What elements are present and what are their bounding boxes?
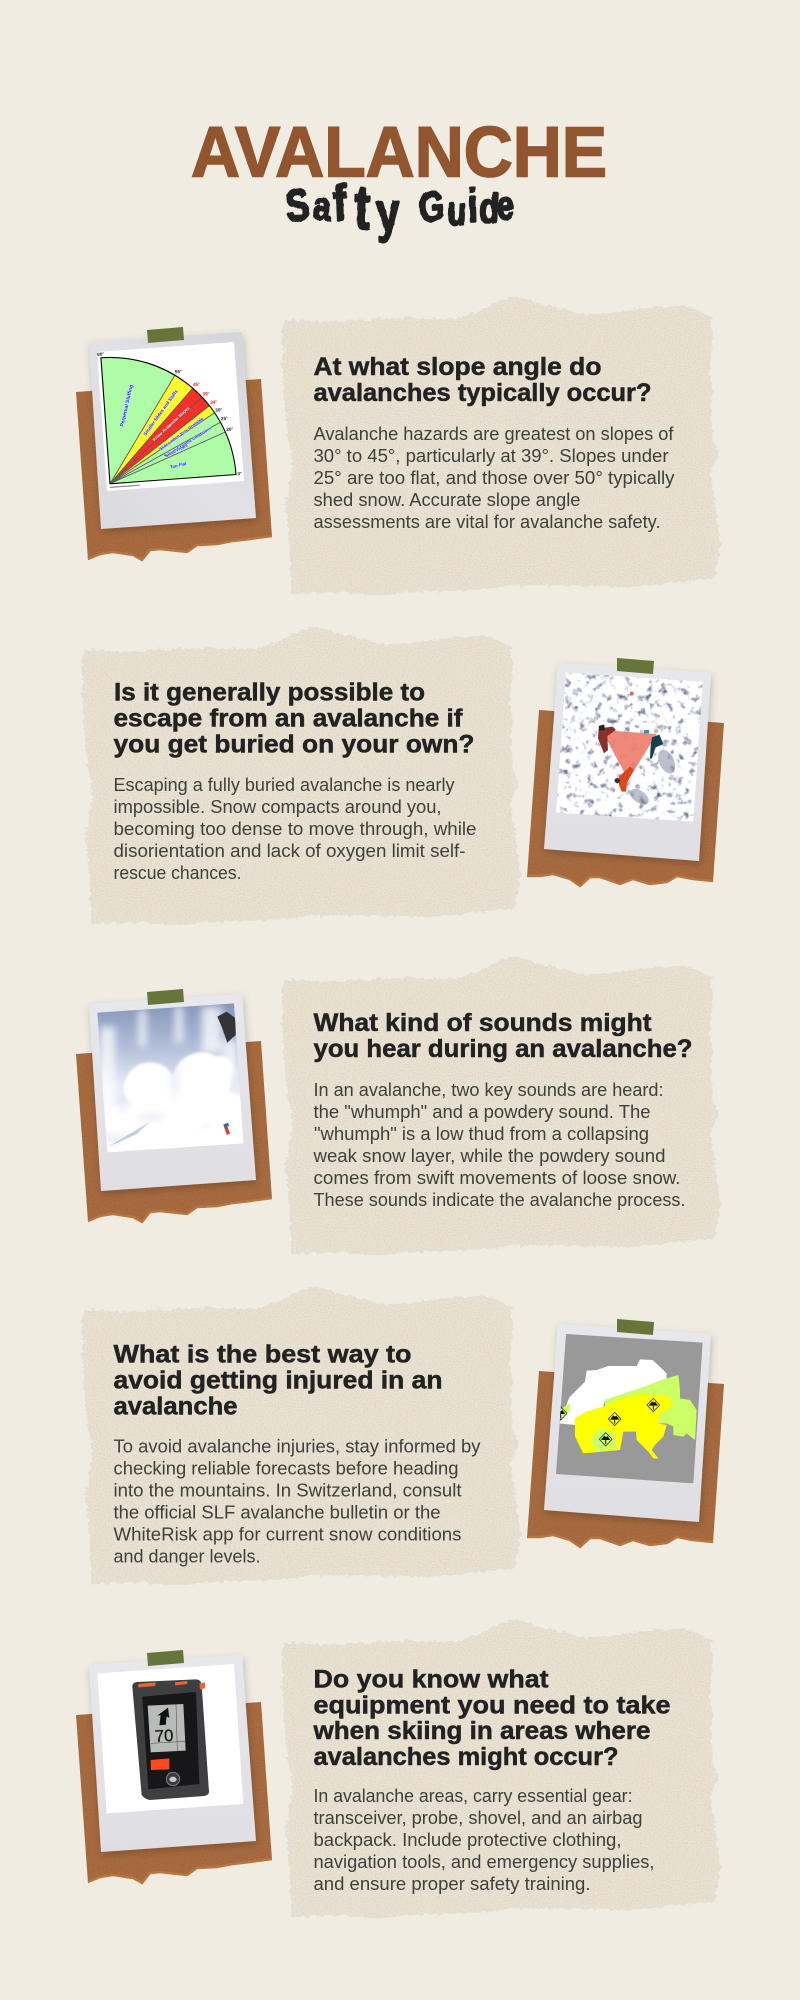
body text [312, 1079, 686, 1210]
torn text card [283, 298, 720, 594]
body text [314, 1785, 654, 1894]
heading: Is it generally possible to [114, 679, 425, 707]
body text: Avalanche hazards are greatest on slopes of [314, 423, 674, 444]
title [191, 114, 607, 243]
chart: slope angle fan: 0° [237, 471, 242, 476]
subtitle: Safty Guide: f [332, 173, 348, 232]
chart: slope angle fan: 30° [215, 407, 223, 413]
panel: avoid injury [83, 1288, 724, 1584]
body text: 25° are too flat, and those over 50° typically [314, 467, 675, 488]
torn text card [83, 1288, 520, 1584]
chart: slope angle fan [97, 342, 244, 491]
body text: shed snow. Accurate slope angle [314, 489, 580, 510]
body text: the "whumph" and a powdery sound. The [314, 1101, 650, 1122]
photo frame: danger map [527, 1324, 724, 1548]
heading: you get buried on your own? [114, 730, 474, 758]
body text: checking reliable forecasts before heading [114, 1458, 458, 1479]
polaroid card [89, 1655, 256, 1852]
title: AVALANCHE: AVALANCHE [191, 114, 607, 192]
heading: you hear during an avalanche? [314, 1035, 692, 1063]
torn text card [283, 1621, 720, 1917]
chart: slope angle fan: 45° [193, 382, 200, 387]
panel: equipment [76, 1621, 720, 1917]
body text: rescue chances. [114, 862, 242, 883]
torn text card [283, 958, 720, 1254]
heading: when skiing in areas where [312, 1717, 651, 1745]
body text: impossible. Snow compacts around you, [114, 796, 442, 817]
heading: What is the best way to [114, 1340, 412, 1368]
photo frame: avalanche cloud [76, 994, 272, 1223]
panel: escape [83, 628, 724, 924]
brown torn paper [76, 379, 272, 561]
body text: "whumph" is a low thud from a collapsing [314, 1123, 649, 1144]
body text: These sounds indicate the avalanche process. [314, 1189, 686, 1210]
chart: slope angle fan: 25° [221, 416, 228, 421]
body text: navigation tools, and emergency supplies, [314, 1851, 654, 1872]
tape [147, 327, 184, 343]
subtitle: Safty Guide: a [312, 183, 333, 230]
tape [617, 658, 654, 674]
body text [114, 774, 476, 883]
tape [147, 1650, 184, 1666]
polaroid card [544, 663, 711, 861]
panel: slope angle [76, 298, 720, 594]
body text: the official SLF avalanche bulletin or the [114, 1502, 440, 1523]
body text [314, 423, 675, 532]
heading [114, 1340, 442, 1420]
photo: avalanche transceiver device: 70 [154, 1726, 174, 1746]
brown torn paper [527, 1371, 724, 1548]
body text: In an avalanche, two key sounds are heard: [314, 1079, 664, 1100]
chart: slope angle fan: Slides when Very Unstable [158, 416, 205, 451]
body text: and danger levels. [114, 1546, 260, 1567]
polaroid card [544, 1324, 711, 1522]
heading: avalanches might occur? [314, 1743, 618, 1771]
body text: becoming too dense to move through, while [114, 818, 476, 839]
panel: sounds [76, 958, 720, 1254]
heading: What kind of sounds might [314, 1009, 652, 1037]
chart: slope angle fan: Too Flat [170, 461, 188, 470]
brown torn paper [76, 1041, 272, 1223]
chart: slope angle fan: 39° [202, 391, 210, 397]
photo: powder avalanche [98, 1004, 244, 1152]
heading: equipment you need to take [314, 1691, 671, 1719]
heading: avalanches typically occur? [314, 379, 652, 407]
body text: In avalanche areas, carry essential gear: [314, 1785, 632, 1806]
body text: To avoid avalanche injuries, stay informed by [114, 1436, 481, 1457]
heading: At what slope angle do [314, 353, 602, 381]
photo frame: rescuers on snow [527, 658, 724, 887]
body text: disorientation and lack of oxygen limit self- [114, 840, 466, 861]
heading [114, 679, 474, 758]
body text: 30° to 45°, particularly at 39°. Slopes under [314, 445, 668, 466]
heading [314, 353, 652, 407]
photo frame: transceiver [76, 1655, 272, 1884]
body text: transceiver, probe, shovel, and an airbag [314, 1807, 642, 1828]
body text: backpack. Include protective clothing, [314, 1829, 622, 1850]
body text: weak snow layer, while the powdery sound [312, 1145, 666, 1166]
chart: slope angle fan: 34° [210, 400, 218, 405]
chart: slope angle fan: 55° [175, 369, 182, 374]
subtitle: Safty Guide: G [418, 182, 446, 231]
heading [314, 1009, 692, 1063]
tape [617, 1319, 654, 1335]
torn text card [83, 628, 520, 924]
chart: slope angle fan: 90° [97, 351, 104, 357]
body text: WhiteRisk app for current snow conditions [114, 1524, 462, 1545]
infographic canvas [76, 126, 724, 1919]
map: Swiss avalanche danger [553, 1330, 707, 1487]
body text: comes from swift movements of loose snow. [314, 1167, 680, 1188]
brown torn paper [76, 1702, 272, 1884]
subtitle: Safty Guide: t [353, 172, 372, 242]
photo frame: slope chart [76, 327, 272, 561]
body text: and ensure proper safety training. [314, 1873, 590, 1894]
chart: slope angle fan: Prime Avalanche Slopes [152, 405, 191, 442]
photo: three rescuers and triangle on snow [553, 670, 707, 827]
brown torn paper [527, 710, 724, 887]
heading: avalanche [114, 1392, 238, 1420]
heading: escape from an avalanche if [114, 704, 463, 732]
subtitle: Safty Guide: d [479, 184, 500, 232]
chart: slope angle fan: Perpetual Sluffing [119, 384, 135, 427]
heading: Do you know what [314, 1665, 549, 1693]
photo: avalanche transceiver device [97, 1664, 243, 1813]
subtitle: Safty Guide: e [495, 183, 516, 229]
body text [114, 1436, 481, 1567]
subtitle: Safty Guide: S [284, 178, 311, 232]
chart: slope angle fan: 20° [226, 427, 234, 432]
tape [147, 989, 184, 1005]
body text: Escaping a fully buried avalanche is nearly [114, 774, 455, 795]
chart: slope angle fan: Smaller Slides and Sluffs [142, 389, 179, 437]
polaroid card [89, 332, 256, 529]
heading [312, 1665, 671, 1771]
heading: avoid getting injured in an [114, 1366, 442, 1394]
chart: slope angle fan: Safe in Extreme Conditions [163, 425, 213, 459]
body text: into the mountains. In Switzerland, consult [114, 1480, 462, 1501]
subtitle: Safty Guide: u [447, 188, 467, 234]
polaroid card [89, 994, 256, 1191]
subtitle: Safty Guide: i [467, 179, 479, 233]
chart: slope angle fan: Slush Flows [164, 442, 189, 458]
subtitle: Safty Guide: y [375, 182, 401, 243]
body text: assessments are vital for avalanche safety. [314, 511, 660, 532]
